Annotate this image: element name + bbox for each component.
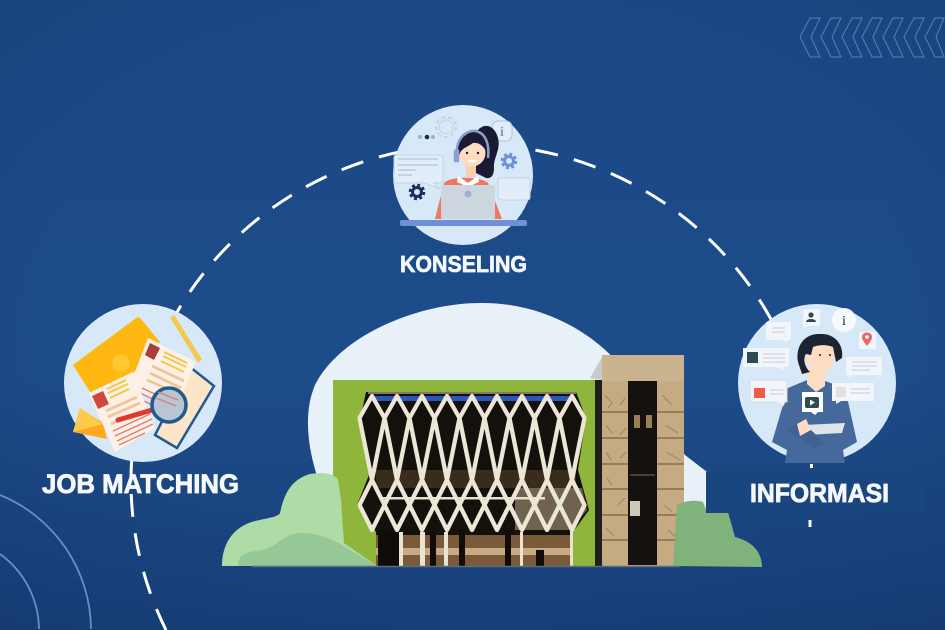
red square card (750, 380, 787, 406)
ground line (252, 566, 680, 568)
face (803, 345, 834, 373)
desk (400, 220, 527, 226)
circle (738, 304, 896, 462)
stone tower (590, 355, 684, 566)
neck (807, 366, 825, 392)
info bubble: i (500, 125, 504, 140)
pencil (172, 316, 200, 361)
video card (802, 392, 823, 415)
laptop (441, 185, 495, 219)
front resume (89, 372, 155, 452)
user card (803, 309, 820, 328)
decorative concentric arcs bottom left (0, 495, 91, 629)
panel: central building illustration (222, 303, 762, 567)
konseling label: KONSELING (400, 251, 527, 277)
image card (743, 348, 789, 371)
right bush (673, 501, 762, 567)
outline gear (436, 117, 456, 137)
envelope (73, 408, 107, 439)
info circle: i (842, 314, 846, 329)
location card (859, 332, 876, 349)
lattice window (357, 392, 589, 566)
yellow folder (73, 317, 160, 400)
three dots (418, 135, 435, 139)
body (435, 178, 502, 219)
green facade frame (333, 380, 597, 566)
dashed arc fragment below informasi (808, 520, 812, 527)
clipboard (155, 367, 214, 448)
lower right card (832, 383, 874, 404)
info circle (832, 308, 856, 332)
person body (772, 380, 857, 463)
right message card (846, 357, 882, 378)
panel: konseling icon (393, 105, 533, 245)
cloud backdrop (308, 303, 707, 566)
informasi label: INFORMASI (750, 478, 889, 508)
left speech bubble (394, 155, 443, 189)
ponytail hair (470, 126, 499, 178)
dark gear (410, 185, 424, 199)
dash below informasi figure (810, 464, 813, 468)
back resume (130, 338, 196, 414)
circle (64, 304, 222, 462)
message card (766, 322, 791, 343)
headset (455, 131, 488, 161)
circle (393, 105, 533, 245)
magnifier (118, 388, 186, 422)
crossed arms and tablet (788, 419, 845, 448)
panel: informasi icon (738, 304, 896, 463)
panel: job matching icon (64, 304, 222, 462)
informasi label backing panel (706, 472, 925, 513)
left bush (222, 473, 377, 566)
hair (797, 334, 842, 374)
head (457, 130, 489, 177)
right speech bubble (498, 178, 530, 200)
blue gear (502, 154, 516, 168)
job matching label: JOB MATCHING (42, 469, 239, 499)
dashed arc connecting services (131, 144, 812, 630)
decorative chevrons top right (800, 18, 944, 57)
collar (457, 176, 479, 187)
